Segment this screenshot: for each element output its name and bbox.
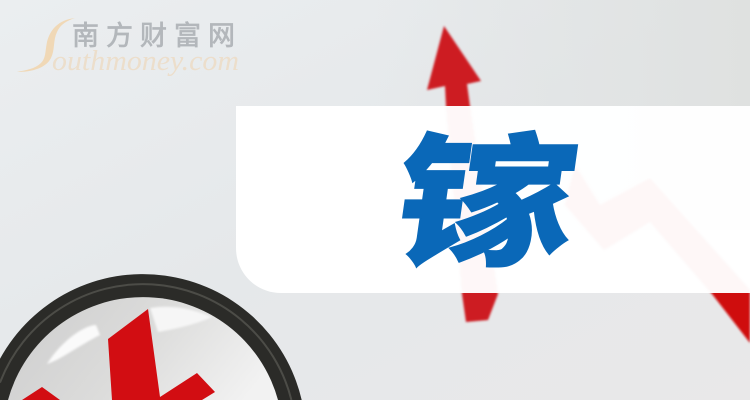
red zigzag line (565, 165, 750, 343)
magnifying glass (0, 274, 302, 400)
red yuan symbol (22, 309, 215, 400)
lens rim (0, 274, 302, 400)
logo: southmoney (17, 18, 239, 77)
logo: latin name: outhmoney.com (52, 46, 239, 77)
logo: Chinese name: 南方财富网 (72, 21, 235, 51)
lens highlight top (150, 307, 212, 332)
white title panel (236, 106, 750, 293)
lens glass (8, 297, 278, 400)
red arrow up (427, 26, 498, 322)
logo: swoosh S (17, 18, 75, 72)
lens highlight (47, 325, 100, 364)
title character: 镓 (386, 125, 586, 284)
rim highlight (0, 284, 291, 400)
